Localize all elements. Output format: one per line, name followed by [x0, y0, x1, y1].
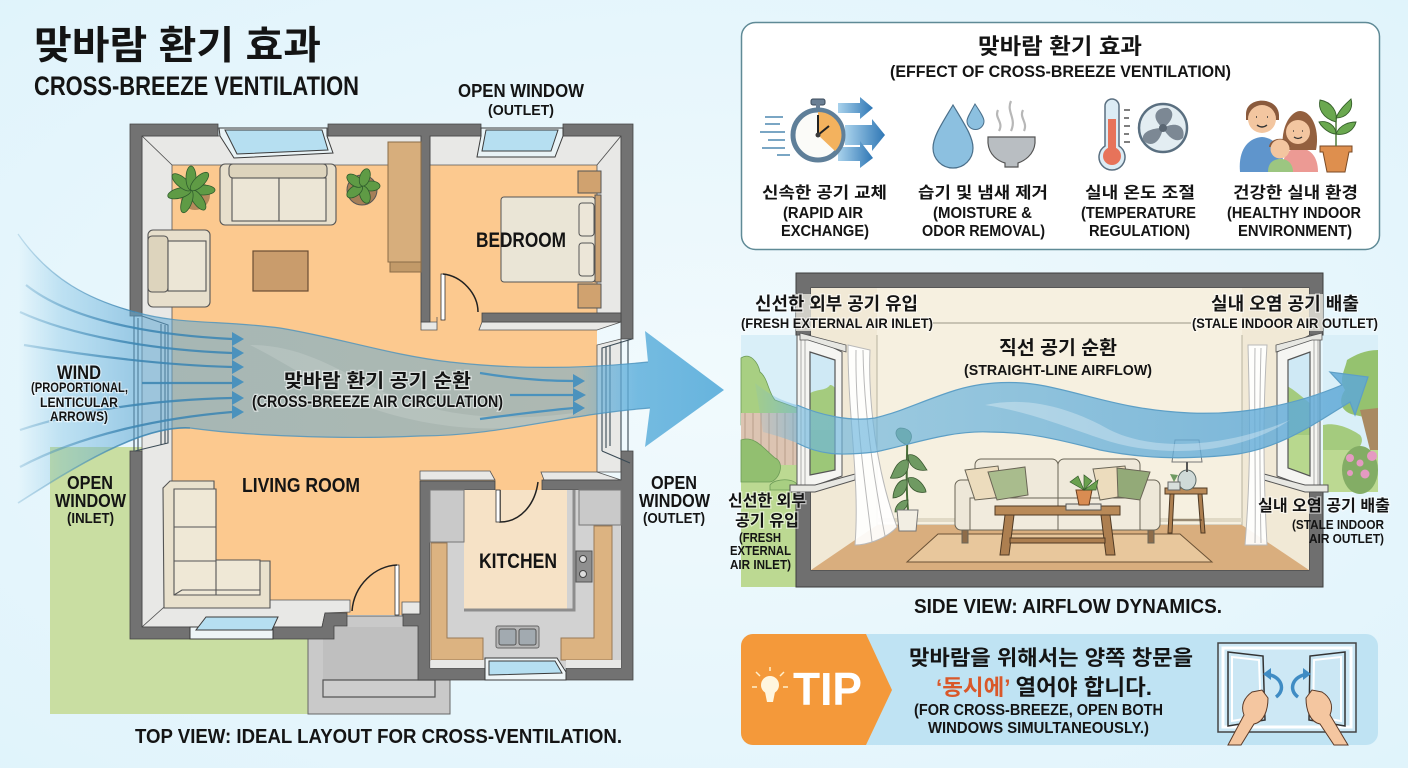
label glow over side walls: [796, 294, 1323, 331]
airflow label: (CROSS-BREEZE AIR CIRCULATION): [252, 392, 503, 411]
wind arrows: [20, 285, 586, 467]
curtain rod: [933, 322, 1191, 324]
inlet label lower: AIR INLET): [730, 557, 791, 572]
effect 4 text: (HEALTHY INDOOR: [1227, 205, 1361, 222]
plant right: [344, 167, 380, 205]
left open window: [134, 316, 168, 451]
outdoor right: [1323, 335, 1378, 494]
inlet label top: 신선한 외부 공기 유입: [755, 294, 918, 314]
icon: opening window with hands: [1218, 643, 1356, 745]
title: [34, 25, 359, 101]
side table and lamp: [1165, 440, 1207, 533]
lawn: [50, 447, 320, 714]
wind label: (PROPORTIONAL,: [31, 379, 128, 395]
inlet label top: [741, 294, 933, 331]
panel: tip: [741, 634, 1378, 745]
effect 3 text: [1081, 184, 1196, 240]
effects heading: [890, 34, 1231, 81]
plant left: [167, 166, 215, 214]
title: CROSS-BREEZE VENTILATION: [34, 71, 359, 101]
back wall: [811, 288, 1309, 570]
effect 3 text: (TEMPERATURE: [1081, 205, 1196, 222]
outdoor left: [741, 335, 797, 587]
tip badge: [741, 634, 892, 745]
cabinet: [388, 142, 421, 272]
open window inlet label: OPEN: [67, 473, 113, 493]
entry door: [352, 565, 399, 615]
open window inlet label: WINDOW: [55, 491, 126, 511]
bedroom door: [441, 274, 478, 320]
table plant: [1066, 475, 1101, 510]
outlet label lower: [1258, 497, 1390, 546]
top windows: [190, 128, 566, 680]
airflow label: [252, 370, 503, 411]
open window outlet label right: [639, 473, 710, 527]
right open window: [602, 339, 632, 463]
room labels: LIVING ROOM: [242, 475, 360, 497]
effect 1 text: 신속한 공기 교체: [762, 184, 887, 202]
icon: stopwatch with arrows: [760, 97, 885, 168]
effect 2 text: [918, 184, 1048, 240]
outlet label lower: AIR OUTLET): [1309, 531, 1384, 546]
straight-line airflow arrow: [755, 372, 1368, 458]
tip text: 맞바람을 위해서는 양쪽 창문을: [909, 647, 1193, 670]
outlet label top: [1192, 294, 1378, 331]
wind label: LENTICULAR: [40, 394, 118, 410]
room walls: [796, 273, 1323, 335]
right window: [1264, 333, 1328, 492]
effect 2 text: ODOR REMOVAL): [922, 223, 1045, 240]
airflow label: 맞바람 환기 공기 순환: [284, 370, 471, 392]
sofa: [220, 164, 336, 225]
inlet label lower: 공기 유입: [735, 512, 799, 530]
tip badge: TIP: [793, 663, 862, 715]
outlet label lower: (STALE INDOOR: [1292, 517, 1385, 532]
coffee table: [253, 251, 308, 291]
inlet label lower: 신선한 외부: [728, 492, 806, 510]
panel: effects: [742, 22, 1380, 250]
wind label: [31, 363, 128, 424]
icon: water drops and bowl: [933, 101, 1035, 168]
effect 3 text: REGULATION): [1089, 223, 1190, 240]
bed: [501, 171, 601, 308]
outlet label top: (STALE INDOOR AIR OUTLET): [1192, 315, 1378, 331]
effect 4 text: 건강한 실내 환경: [1233, 184, 1358, 202]
inlet label lower: (FRESH: [739, 530, 781, 545]
panel: top view floor plan: [18, 81, 724, 748]
open window outlet label right: WINDOW: [639, 491, 710, 511]
inner wall faces: [142, 136, 621, 627]
effects heading: 맞바람 환기 효과: [978, 34, 1142, 59]
effect 1 text: EXCHANGE): [781, 223, 869, 240]
effects heading: (EFFECT OF CROSS-BREEZE VENTILATION): [890, 62, 1231, 81]
cross-breeze airflow band with arrow: [18, 234, 724, 503]
icon: family and plant: [1240, 99, 1356, 172]
effect 3 text: 실내 온도 조절: [1085, 184, 1195, 202]
inlet label top: (FRESH EXTERNAL AIR INLET): [741, 315, 933, 331]
open window outlet label right: OPEN: [651, 473, 697, 493]
open window outlet label top: [458, 81, 584, 119]
straight-line airflow label: (STRAIGHT-LINE AIRFLOW): [964, 362, 1152, 379]
straight-line airflow label: 직선 공기 순환: [999, 337, 1117, 359]
coffee table side view: [995, 506, 1120, 555]
side view caption: SIDE VIEW: AIRFLOW DYNAMICS.: [914, 596, 1222, 618]
effect 1 text: (RAPID AIR: [783, 205, 863, 222]
effect 1 text: [762, 184, 887, 240]
icon: thermometer and fan: [1099, 99, 1187, 170]
curtains: [848, 345, 1267, 545]
inlet label lower: EXTERNAL: [730, 543, 791, 558]
room labels: [242, 229, 566, 573]
open window inlet label: (INLET): [67, 510, 114, 527]
tip text: [909, 647, 1193, 737]
walls: [130, 124, 633, 680]
entry porch: [308, 616, 450, 714]
effect 2 text: 습기 및 냄새 제거: [918, 184, 1048, 202]
outlet label lower: 실내 오염 공기 배출: [1258, 497, 1390, 515]
floor plant: [890, 428, 927, 531]
floor and rug: [811, 525, 1309, 570]
effect 4 text: [1227, 184, 1361, 240]
sink: [496, 626, 539, 648]
wind label: ARROWS): [50, 408, 108, 424]
open window inlet label: [55, 473, 126, 527]
sofa side view: [955, 459, 1160, 543]
L-shaped sofa: [163, 481, 270, 608]
effect 4 text: ENVIRONMENT): [1238, 223, 1352, 240]
effect 2 text: (MOISTURE &: [933, 205, 1032, 222]
straight-line airflow label: [964, 337, 1152, 379]
tip text: WINDOWS SIMULTANEOUSLY.): [928, 720, 1149, 737]
panel: side view room: [728, 273, 1390, 618]
living room floor: [172, 165, 597, 615]
armchair: [148, 230, 210, 307]
stove: [576, 551, 592, 582]
top view caption: TOP VIEW: IDEAL LAYOUT FOR CROSS-VENTILATION.: [135, 726, 622, 748]
title: 맞바람 환기 효과: [34, 25, 321, 68]
tip text: (FOR CROSS-BREEZE, OPEN BOTH: [914, 702, 1163, 719]
open window outlet label top: OPEN WINDOW: [458, 81, 584, 101]
room labels: KITCHEN: [479, 550, 557, 573]
kitchen: [430, 482, 621, 668]
open window outlet label top: (OUTLET): [488, 102, 554, 119]
tip text: ‘동시에’ 열어야 합니다.: [936, 675, 1152, 700]
room labels: BEDROOM: [476, 229, 566, 252]
icon: light bulb: [752, 667, 788, 702]
outlet label top: 실내 오염 공기 배출: [1211, 294, 1359, 314]
left window: [790, 333, 855, 492]
inlet label lower: [728, 492, 806, 572]
wind label: WIND: [57, 363, 101, 384]
open window outlet label right: (OUTLET): [643, 510, 705, 527]
